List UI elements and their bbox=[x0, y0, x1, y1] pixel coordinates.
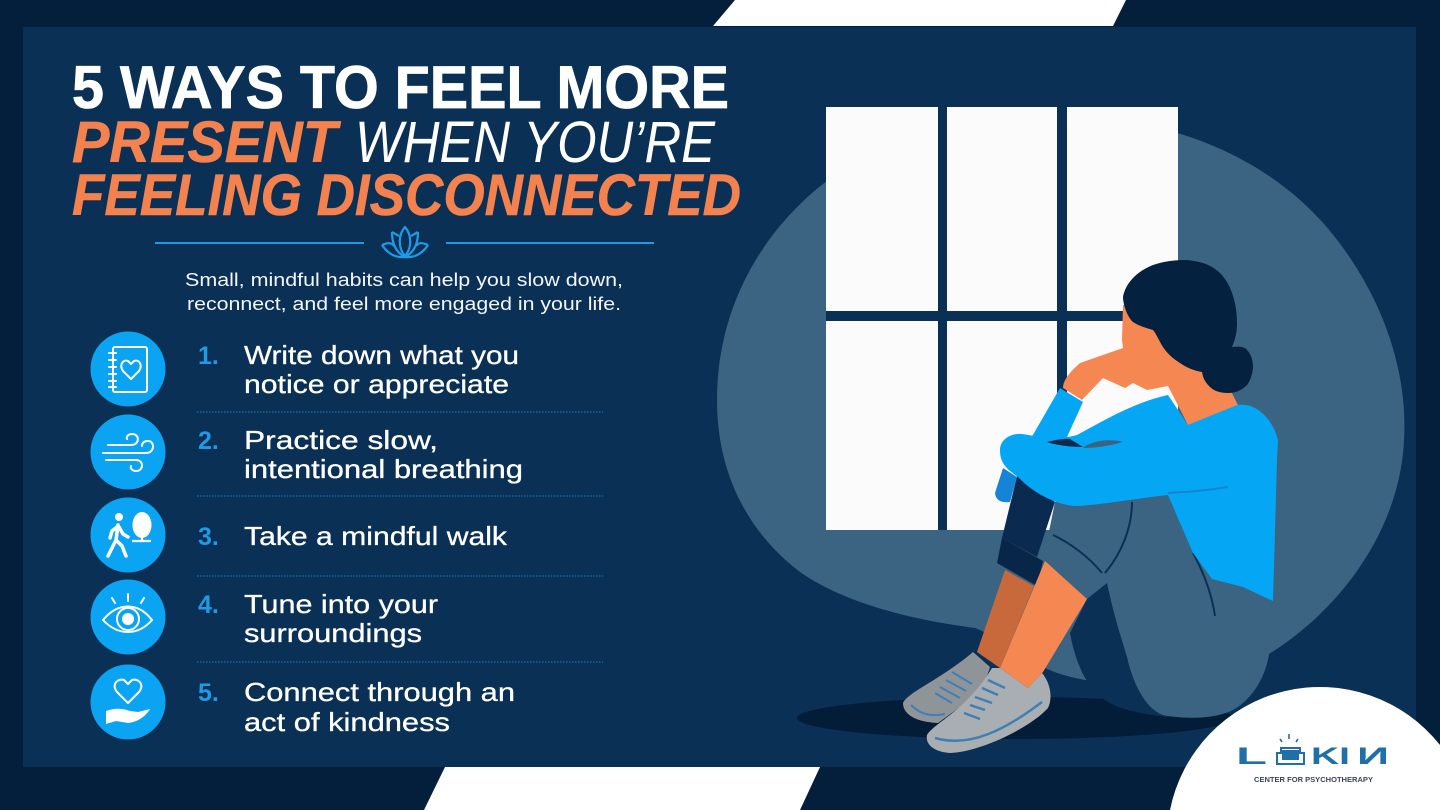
near leg skin bbox=[1000, 561, 1087, 688]
list item 4 bbox=[90, 580, 438, 654]
top white slanted band bbox=[713, 0, 1126, 26]
list item 5 bbox=[90, 664, 515, 740]
icon: lotus bbox=[382, 227, 428, 257]
sweater forearm bbox=[1030, 388, 1083, 447]
title: PRESENT bbox=[72, 110, 341, 175]
icon: eye bbox=[103, 594, 152, 632]
list item 1: 1. bbox=[198, 342, 219, 370]
list item 3: 3. bbox=[198, 523, 219, 551]
logo wordmark: N bbox=[1357, 743, 1389, 770]
logo wordmark: L bbox=[1236, 743, 1267, 770]
title bbox=[72, 54, 741, 228]
intro text: Small, mindful habits can help you slow down, bbox=[185, 270, 623, 290]
list item 5: Connect through an bbox=[244, 677, 515, 707]
back shoe bbox=[903, 652, 990, 723]
list item 5: act of kindness bbox=[244, 707, 450, 737]
background blob bbox=[717, 115, 1404, 680]
far leg skin bbox=[977, 570, 1034, 668]
icon: walker and tree bbox=[108, 512, 152, 556]
window bbox=[826, 107, 1178, 530]
icon: journal bbox=[109, 347, 147, 392]
title: FEELING DISCONNECTED bbox=[72, 163, 741, 228]
sweater lower sleeve bbox=[995, 468, 1017, 502]
title: WHEN YOU’RE bbox=[355, 110, 716, 175]
intro text bbox=[185, 270, 623, 314]
list item 2 bbox=[90, 414, 523, 490]
logo wordmark: KI bbox=[1311, 743, 1350, 770]
icon: heart over hand bbox=[106, 680, 150, 724]
list item 3 bbox=[90, 498, 508, 572]
bottom white slanted band bbox=[424, 767, 820, 810]
logo tagline: CENTER FOR PSYCHOTHERAPY bbox=[1254, 777, 1373, 784]
list item 2: 2. bbox=[198, 427, 219, 455]
list item 2: Practice slow, bbox=[244, 425, 438, 455]
logo badge bbox=[1170, 687, 1440, 810]
illustration: seated woman bbox=[797, 260, 1300, 753]
far leg dark bbox=[1002, 476, 1055, 557]
trousers: hip and thigh bbox=[1043, 494, 1300, 718]
gap between legs bbox=[1070, 580, 1175, 717]
front shoe bbox=[927, 668, 1050, 753]
trouser creases bbox=[1053, 502, 1215, 616]
list item 4: Tune into your bbox=[244, 589, 438, 619]
far leg cuff bbox=[997, 538, 1043, 586]
list item 1: Write down what you bbox=[244, 340, 519, 370]
intro text: reconnect, and feel more engaged in your life. bbox=[187, 294, 621, 314]
list item 4: 4. bbox=[198, 591, 219, 619]
logo wordmark bbox=[1236, 734, 1389, 770]
floor shadow bbox=[797, 697, 1233, 739]
list item 4: surroundings bbox=[244, 618, 422, 648]
window frame bbox=[826, 107, 1178, 441]
list item 1 bbox=[90, 332, 519, 406]
list item 2: intentional breathing bbox=[244, 454, 523, 484]
sweater body and arm bbox=[1000, 395, 1278, 601]
list item 1: notice or appreciate bbox=[244, 369, 509, 399]
list item 3: Take a mindful walk bbox=[244, 521, 508, 551]
face, neck and hand bbox=[1063, 300, 1238, 425]
sweater crease bbox=[1047, 439, 1083, 447]
divider with lotus bbox=[155, 227, 654, 257]
list item 5: 5. bbox=[198, 679, 219, 707]
title: 5 WAYS TO FEEL MORE bbox=[72, 54, 729, 121]
hair bbox=[1123, 260, 1253, 393]
icon: wind bbox=[103, 434, 153, 471]
